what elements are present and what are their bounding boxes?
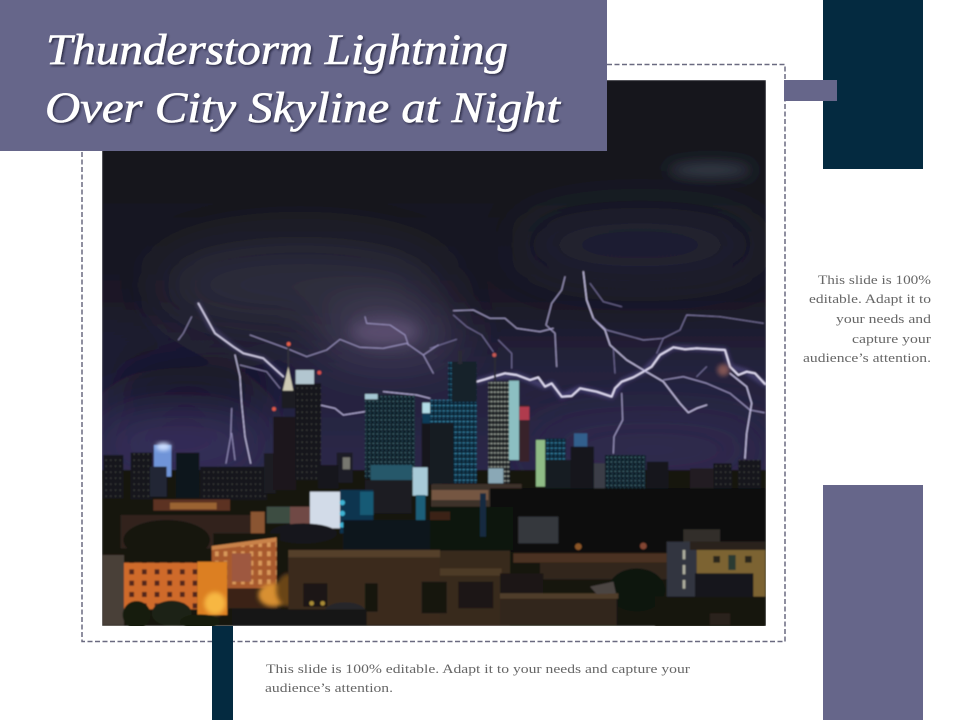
storm clouds bbox=[90, 215, 770, 474]
navy block: top right bbox=[823, 0, 923, 169]
text block: bottom bbox=[265, 661, 691, 695]
purple block: bottom right bbox=[823, 485, 923, 720]
text block: bottom: audience’s attention. bbox=[265, 680, 393, 695]
text block: bottom: This slide is 100% editable. Adapt it to your needs and capture your bbox=[266, 661, 691, 676]
skyline: right towers bbox=[430, 351, 765, 627]
title: Thunderstorm Lightning bbox=[46, 27, 508, 74]
foreground: orange and brown buildings bbox=[103, 537, 440, 629]
text block: right: This slide is 100% bbox=[818, 272, 931, 287]
skyline: left towers bbox=[103, 342, 442, 560]
text block: right: editable. Adapt it to bbox=[809, 291, 931, 306]
photo: lightning over city skyline bbox=[102, 80, 766, 626]
sky bbox=[102, 80, 766, 480]
text block: right: capture your bbox=[852, 331, 932, 346]
text block: right bbox=[803, 272, 932, 365]
navy bar: bottom bbox=[212, 626, 233, 720]
title bbox=[45, 27, 564, 135]
lightning: left bbox=[178, 303, 438, 463]
purple connector bar bbox=[784, 80, 837, 101]
text block: right: audience’s attention. bbox=[803, 350, 931, 365]
lightning: right bbox=[430, 272, 765, 458]
title: Over City Skyline at Night bbox=[45, 85, 561, 132]
text block: right: your needs and bbox=[836, 311, 932, 326]
ground mass bbox=[102, 470, 766, 626]
title banner bbox=[0, 0, 607, 151]
